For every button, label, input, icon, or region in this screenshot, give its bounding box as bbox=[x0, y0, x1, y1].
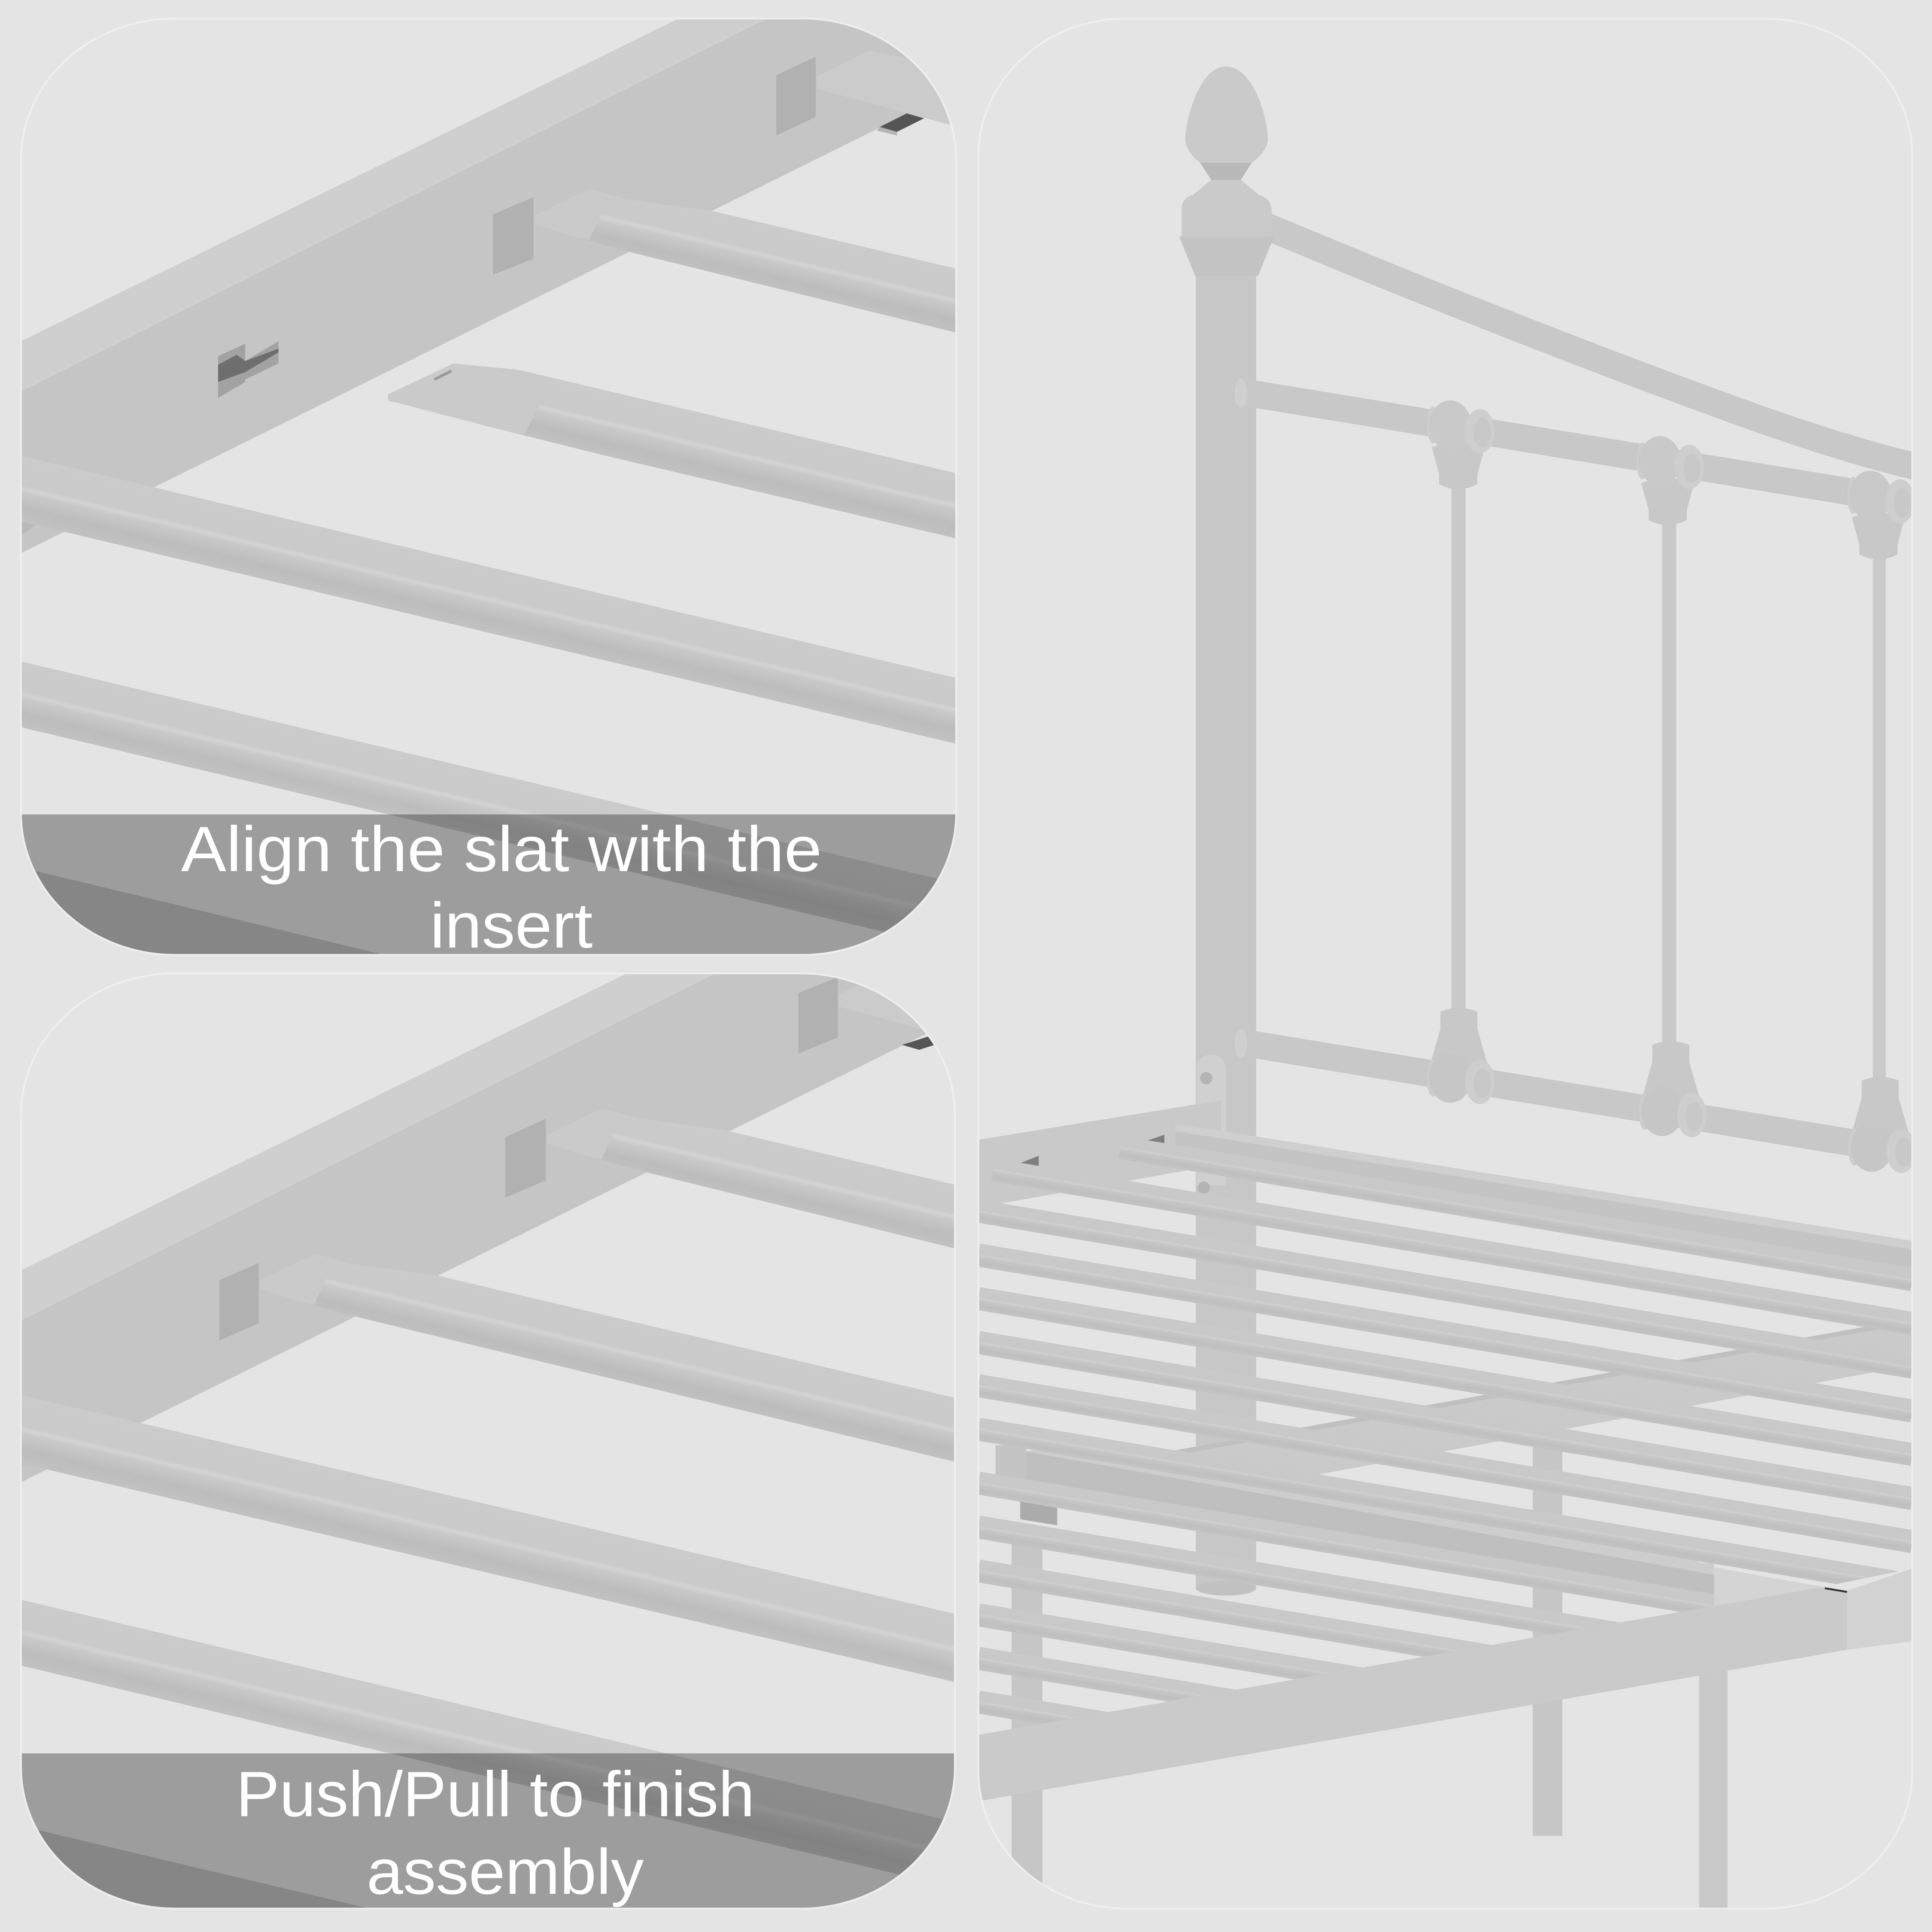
slat: second bbox=[547, 1108, 973, 1253]
inner side rail bbox=[996, 1438, 1714, 1616]
slat: third bbox=[0, 1425, 973, 1653]
plate: insert tab far bbox=[776, 57, 816, 136]
slat: third bbox=[0, 483, 973, 715]
caption: push pull: assembly bbox=[367, 1836, 644, 1908]
rail end piece bbox=[1825, 1568, 1912, 1650]
bracket with screws bbox=[1197, 1055, 1226, 1194]
plate: insert tab far bbox=[799, 977, 838, 1054]
caption: push pull bbox=[21, 1753, 955, 1908]
spindles bbox=[1452, 487, 1886, 1087]
slat: detached with flat end bbox=[388, 364, 973, 543]
caption: push pull: Push/Pull to finish bbox=[236, 1758, 755, 1830]
slot: empty T insert bbox=[218, 341, 279, 398]
slat: fifth bbox=[21, 867, 384, 955]
panel outline: top left bbox=[21, 18, 956, 955]
front joint box bbox=[1714, 1567, 1823, 1607]
panel outline: right bbox=[978, 18, 1912, 1908]
slat: installed second bbox=[591, 211, 955, 332]
headboard post bbox=[1196, 271, 1256, 1596]
slat: far bbox=[839, 969, 978, 1050]
lower rail bbox=[1235, 1029, 1912, 1153]
curved top rail bbox=[1262, 224, 1922, 468]
long head bar bbox=[1176, 1124, 1912, 1272]
caption: align the slat bbox=[21, 813, 956, 961]
beam: side rail with tabs bbox=[21, 973, 973, 1482]
panel outline: bottom left bbox=[21, 973, 955, 1908]
upper knuckles bbox=[1427, 401, 1915, 559]
slat: fourth bbox=[0, 690, 973, 920]
caption: align the slat: insert bbox=[430, 890, 592, 961]
slat: installed top bbox=[878, 98, 951, 136]
front rail bbox=[978, 1587, 1847, 1800]
slat: fourth bbox=[0, 1628, 973, 1859]
slats bbox=[978, 1147, 1912, 1858]
panel: bed frame bbox=[978, 18, 1922, 1908]
finial bbox=[1179, 67, 1274, 276]
slat: fifth bbox=[21, 1826, 370, 1908]
panel: push pull bbox=[0, 969, 978, 1908]
centre support bar bbox=[1176, 1318, 1912, 1501]
panel: align the slat bbox=[0, 18, 973, 961]
lower knuckles bbox=[1427, 1008, 1916, 1173]
plate: insert tab middle bbox=[505, 1119, 546, 1198]
bed leg: front left bbox=[1012, 1540, 1042, 1908]
plate: insert tab near bbox=[219, 1263, 259, 1340]
slat: seated bbox=[260, 1254, 973, 1466]
caption: align the slat: Align the slat with the bbox=[181, 813, 822, 885]
bed leg: front right bbox=[1699, 1626, 1728, 1908]
upper rail bbox=[1235, 378, 1912, 502]
plate: insert tab middle bbox=[493, 197, 534, 275]
head beam bbox=[978, 1100, 1221, 1207]
beam: side rail with slots bbox=[21, 18, 973, 553]
bed leg: centre bbox=[1533, 1442, 1562, 1836]
